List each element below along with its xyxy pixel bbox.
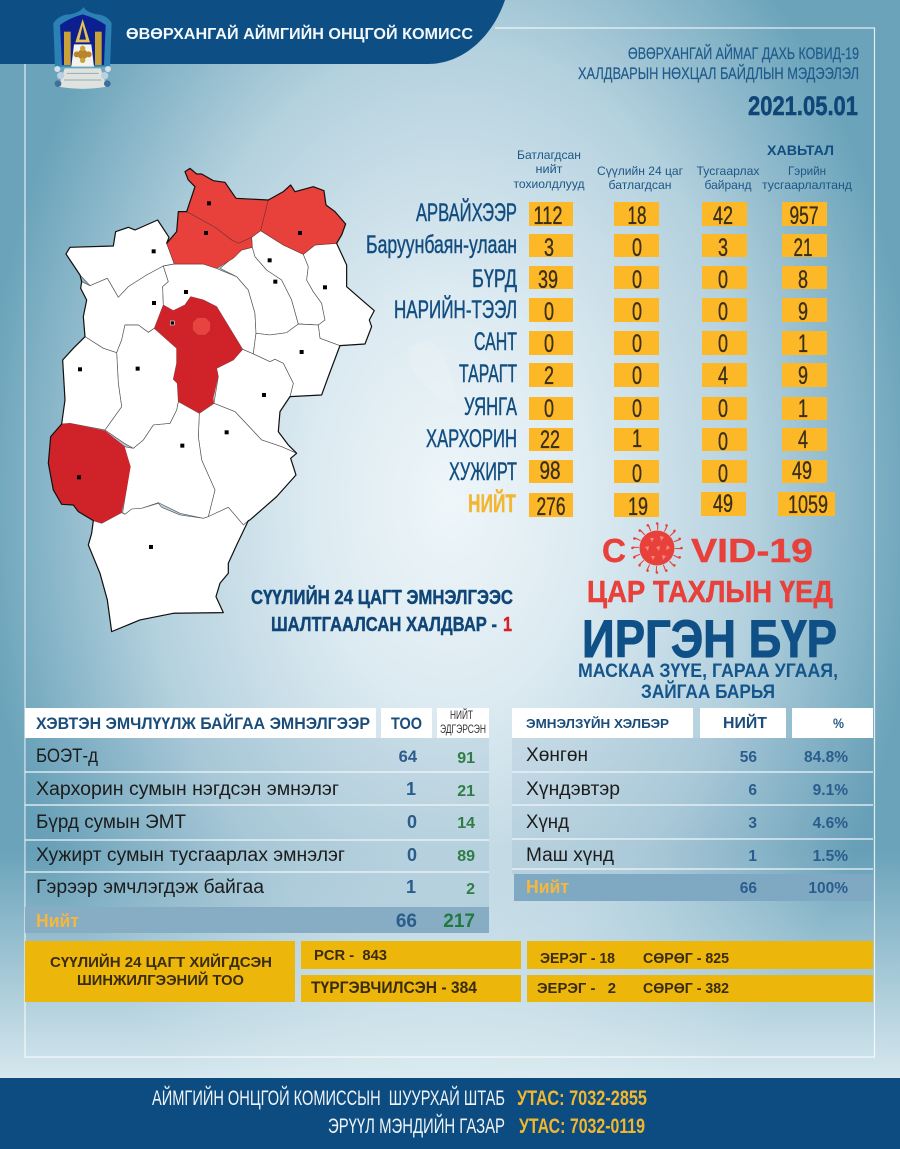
inpatient counts	[399, 748, 475, 898]
hospital names: Гэрээр эмчлэгдэж байгаа	[36, 877, 264, 898]
inpatient counts: 91	[457, 750, 475, 767]
affected soum: centre	[154, 297, 243, 413]
column headers: тохиолдлууд	[514, 177, 584, 191]
column headers	[514, 142, 852, 192]
hospital names	[36, 746, 345, 898]
affected soum: north-east	[261, 185, 346, 254]
panel: tests in last 24 hours: СҮҮЛИЙН 24 ЦАГТ ХИЙГДСЭН	[50, 953, 272, 971]
inpatient counts: 0	[407, 812, 417, 832]
rapid tests: ТҮРГЭВЧИЛСЭН - 384	[311, 978, 477, 997]
yellow cells	[529, 202, 835, 517]
cell values: 0	[544, 330, 554, 358]
hospital names: Хужирт сумын тусгаарлах эмнэлэг	[36, 845, 345, 866]
column headers: Тусгаарлах	[696, 164, 760, 178]
panel: inpatients by hospital	[25, 707, 489, 933]
cell values	[534, 202, 828, 521]
total row: 66	[396, 911, 417, 932]
rapid results: СӨРӨГ - 382	[643, 981, 729, 997]
hospital names: Бүрд сумын ЭМТ	[36, 812, 186, 833]
soum names: УЯНГА	[464, 393, 517, 421]
table header: НИЙТ	[450, 707, 473, 722]
every citizen headline: ИРГЭН БҮР	[582, 610, 837, 669]
cell values: 1	[798, 330, 808, 358]
affected soum: north-west	[167, 212, 252, 268]
table header: %	[833, 715, 844, 731]
PCR results: СӨРӨГ - 825	[643, 951, 729, 967]
total row	[25, 907, 489, 933]
cell values: 0	[632, 460, 642, 488]
hospital names: БОЭТ-д	[36, 746, 98, 767]
column headers: нийт	[536, 162, 563, 176]
cell values: 3	[544, 234, 554, 262]
form names	[526, 745, 620, 866]
soum names: БҮРД	[472, 265, 517, 293]
panel: tests in last 24 hours	[25, 941, 873, 1002]
rapid tests	[301, 975, 521, 1002]
affected soum: north	[185, 168, 268, 243]
hospital-check infection note: СҮҮЛИЙН 24 ЦАГТ ЭМНЭЛГЭЭС	[251, 585, 513, 609]
form values: 1	[748, 848, 757, 865]
soum names: ТАРАГТ	[459, 360, 517, 388]
operations staff phone: УТАС: 7032-2855	[517, 1087, 647, 1110]
form values: 84.8%	[804, 749, 848, 766]
hospital-check infection note: ШАЛТГААЛСАН ХАЛДВАР -	[271, 614, 497, 636]
table header: ЭМНЭЛЗҮЙН ХЭЛБЭР	[526, 716, 669, 731]
soum names: Баруунбаян-улаан	[366, 231, 517, 259]
inpatient counts: 21	[457, 783, 475, 800]
cell values: 0	[718, 395, 728, 423]
inpatient counts: 89	[457, 848, 475, 865]
panel: tests in last 24 hours: ШИНЖИЛГЭЭНИЙ ТОО	[77, 971, 244, 989]
hospital names: Хархорин сумын нэгдсэн эмнэлэг	[36, 779, 339, 800]
total row: Нийт	[36, 911, 79, 931]
map of soums	[48, 168, 457, 632]
faint map watermark	[408, 340, 457, 403]
cell values: 49	[713, 490, 733, 518]
PCR tests	[301, 941, 521, 969]
inpatient counts: 64	[399, 748, 418, 766]
inpatient counts: 2	[466, 881, 475, 898]
advice text: ЗАЙГАА БАРЬЯ	[641, 681, 775, 703]
cell values: 0	[632, 234, 642, 262]
advice text: МАСКАА ЗҮҮЕ, ГАРАА УГААЯ,	[578, 661, 838, 682]
soum names: НАРИЙН-ТЭЭЛ	[394, 294, 517, 324]
hospital-check infection note	[251, 585, 513, 636]
cell values: 112	[534, 202, 562, 230]
footer contact bar	[0, 1078, 900, 1149]
table header: ХЭВТЭН ЭМЧЛҮҮЛЖ БАЙГАА ЭМНЭЛГЭЭР	[36, 714, 370, 733]
cell values: 49	[792, 457, 812, 485]
cell values: 0	[718, 428, 728, 456]
total row: Нийт	[526, 877, 569, 897]
title	[578, 44, 859, 83]
rapid results: ЭЕРЭГ - 2	[537, 981, 616, 997]
soum data table	[366, 197, 835, 521]
cell values: 4	[718, 362, 728, 390]
cell values: 1	[632, 425, 642, 453]
cell values: 98	[540, 457, 560, 485]
inpatient counts: 1	[406, 877, 416, 897]
cell values: 0	[632, 362, 642, 390]
covid heading: VID-19	[691, 532, 813, 569]
pandemic line: ЦАР ТАХЛЫН ҮЕД	[587, 574, 833, 609]
inpatient counts: 14	[457, 815, 475, 832]
covid heading: C	[602, 532, 626, 569]
cell values: 0	[718, 298, 728, 326]
column headers: Сүүлийн 24 цаг	[597, 164, 684, 178]
cell values: 42	[713, 202, 733, 230]
table header	[25, 707, 489, 738]
cell values: 9	[798, 362, 808, 390]
icon: provincial emblem	[53, 7, 112, 89]
cell values: 0	[632, 330, 642, 358]
total row	[514, 874, 873, 901]
cell values: 2	[544, 362, 554, 390]
cell values: 0	[632, 395, 642, 423]
icon: coronavirus	[632, 524, 682, 572]
table header: НИЙТ	[723, 713, 767, 732]
column headers: батлагдсан	[608, 178, 672, 192]
cell values: 1	[798, 395, 808, 423]
cell values: 0	[632, 298, 642, 326]
total row: 100%	[808, 880, 848, 897]
affected soum: west	[48, 423, 131, 523]
cell values: 8	[798, 266, 808, 294]
soum names: САНТ	[474, 328, 517, 356]
form names: Хүнд	[526, 812, 569, 833]
inpatient counts: 0	[407, 845, 417, 865]
covid-19 slogan	[578, 524, 838, 703]
cell values: 0	[632, 266, 642, 294]
cell values: 18	[628, 202, 646, 230]
soum names: НИЙТ	[468, 488, 516, 518]
form values: 9.1%	[813, 782, 848, 799]
cell values: 21	[794, 234, 812, 262]
total row: 217	[443, 911, 475, 932]
soum centre markers	[77, 201, 327, 549]
cell values: 0	[718, 330, 728, 358]
health department phone: ЭРҮҮЛ МЭНДИЙН ГАЗАР	[328, 1114, 505, 1138]
hospital-check infection note: 1	[503, 614, 512, 636]
PCR tests: PCR - 843	[314, 947, 387, 964]
form values: 4.6%	[813, 815, 848, 832]
soum names	[366, 197, 517, 518]
table header	[512, 708, 873, 738]
form names: Маш хүнд	[526, 845, 614, 866]
cell values: 4	[798, 426, 808, 454]
cell values: 957	[790, 202, 818, 230]
cell values: 0	[544, 395, 554, 423]
column headers: тусгаарлалтанд	[762, 178, 852, 192]
cell values: 0	[718, 266, 728, 294]
cell values: 1059	[788, 491, 828, 519]
cell values: 19	[628, 493, 648, 521]
cell values: 3	[718, 234, 728, 262]
date: 2021.05.01	[748, 91, 858, 121]
soum names: ХАРХОРИН	[426, 425, 517, 453]
soum names: ХУЖИРТ	[449, 458, 517, 486]
operations staff phone: АЙМГИЙН ОНЦГОЙ КОМИССЫН ШУУРХАЙ ШТАБ	[152, 1086, 505, 1110]
column headers: Батлагдсан	[517, 148, 581, 162]
rapid results	[527, 975, 873, 1002]
inpatient counts: 1	[406, 779, 416, 799]
table header: ЭДГЭРСЭН	[440, 722, 486, 736]
total row: 66	[740, 880, 757, 897]
hospitalisation heading: ХАВЬТАЛ	[767, 142, 834, 158]
panel: clinical forms	[512, 708, 873, 901]
cell values: 276	[536, 493, 566, 521]
form values: 56	[740, 749, 757, 766]
covid heading	[602, 532, 813, 569]
form names: Хөнгөн	[526, 745, 588, 766]
cell values: 0	[718, 460, 728, 488]
advice text	[578, 661, 838, 703]
form values: 1.5%	[813, 848, 848, 865]
cell values: 39	[538, 266, 558, 294]
form names: Хүндэвтэр	[526, 779, 620, 800]
header title: ӨВӨРХАНГАЙ АЙМГИЙН ОНЦГОЙ КОМИСС	[126, 24, 473, 43]
form values: 6	[748, 782, 757, 799]
table header: ТОО	[391, 714, 422, 733]
cell values: 0	[544, 298, 554, 326]
PCR results	[527, 941, 873, 969]
health department phone: УТАС: 7032-0119	[519, 1115, 645, 1138]
column headers: байранд	[704, 178, 752, 192]
soum names: АРВАЙХЭЭР	[416, 197, 517, 227]
aimag outline	[48, 168, 374, 632]
cell values: 9	[798, 298, 808, 326]
cell values: 22	[540, 426, 560, 454]
header banner	[0, 0, 505, 64]
form values: 3	[748, 815, 757, 832]
column headers: Гэрийн	[788, 164, 826, 178]
Arvaikheer city marker	[193, 318, 210, 335]
form values	[740, 749, 848, 865]
PCR results: ЭЕРЭГ - 18	[540, 951, 615, 967]
